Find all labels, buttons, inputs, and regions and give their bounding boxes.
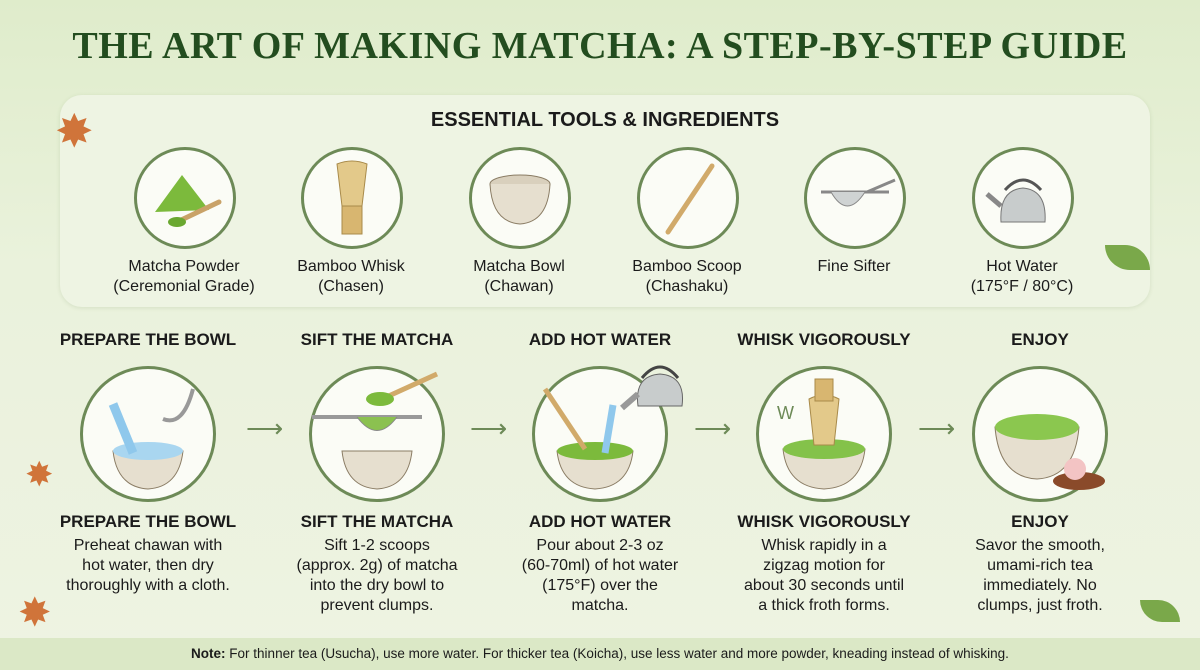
step description: about 30 seconds until xyxy=(744,577,904,594)
step illustration xyxy=(756,366,892,502)
step description: hot water, then dry xyxy=(82,557,214,574)
icon: leaves left: ✸ xyxy=(25,456,54,494)
panel heading: ESSENTIAL TOOLS & INGREDIENTS xyxy=(431,109,779,131)
step description xyxy=(744,537,904,614)
step description: prevent clumps. xyxy=(321,597,433,614)
step 5: enjoy: ENJOY xyxy=(1011,512,1069,531)
icon: leaves bottom-right xyxy=(1140,600,1180,622)
step 3: add hot water xyxy=(522,330,683,614)
step 5: enjoy: ENJOY xyxy=(1011,330,1069,349)
step description: (60-70ml) of hot water xyxy=(522,557,678,574)
icon circle xyxy=(134,147,236,249)
note bar xyxy=(0,638,1200,670)
arrow 3: ⟶ xyxy=(694,413,731,443)
tool: matcha powder xyxy=(113,147,255,295)
step 2: sift the matcha: SIFT THE MATCHA xyxy=(301,512,453,531)
step 4: whisk vigorously xyxy=(737,330,911,614)
step 3: add hot water: ADD HOT WATER xyxy=(529,512,671,531)
step 2: sift the matcha: SIFT THE MATCHA xyxy=(301,330,453,349)
arrow 2: ⟶ xyxy=(470,413,507,443)
tool: bamboo scoop xyxy=(632,147,742,295)
icon: kettle xyxy=(620,366,683,410)
step 2: sift the matcha xyxy=(297,330,458,614)
step description: zigzag motion for xyxy=(763,557,885,574)
tool: fine sifter xyxy=(804,147,906,275)
step description: (approx. 2g) of matcha xyxy=(297,557,457,574)
step description: umami-rich tea xyxy=(987,557,1093,574)
step description xyxy=(522,537,678,614)
step description: Whisk rapidly in a xyxy=(761,537,887,554)
tool: matcha bowl xyxy=(469,147,571,295)
tool: matcha bowl: (Chawan) xyxy=(484,278,554,295)
step description xyxy=(297,537,458,614)
tool: bamboo whisk: Bamboo Whisk xyxy=(297,258,405,275)
step title: PREPARE THE BOWL xyxy=(60,512,236,531)
note bar: Note: For thinner tea (Usucha), use more water. For thicker tea (Koicha), use less water and more powder, kneading instead of whisking. xyxy=(191,646,1009,661)
tool: matcha bowl: Matcha Bowl xyxy=(473,258,565,275)
step description: matcha. xyxy=(572,597,628,614)
step illustration xyxy=(532,366,668,502)
step description: immediately. No xyxy=(983,577,1097,594)
step description: Sift 1-2 scoops xyxy=(324,537,430,554)
step illustration: W xyxy=(777,403,794,423)
label: (Ceremonial Grade) xyxy=(113,278,255,295)
step description: thoroughly with a cloth. xyxy=(66,577,230,594)
step illustration xyxy=(972,366,1108,502)
step 4: whisk vigorously: WHISK VIGOROUSLY xyxy=(737,512,911,531)
step description: Pour about 2-3 oz xyxy=(536,537,664,554)
step 4: whisk vigorously: WHISK VIGOROUSLY xyxy=(737,330,911,349)
arrow 1: ⟶ xyxy=(246,413,283,443)
label xyxy=(113,258,255,295)
tool: bamboo whisk: (Chasen) xyxy=(318,278,384,295)
tool: fine sifter: Fine Sifter xyxy=(818,258,890,275)
step description: (175°F) over the xyxy=(542,577,658,594)
icon: tea leaf right xyxy=(1105,245,1150,270)
arrow 4: ⟶ xyxy=(918,413,955,443)
step heading top: PREPARE THE BOWL xyxy=(60,330,236,349)
step 3: add hot water: ADD HOT WATER xyxy=(529,330,671,349)
step description: Preheat chawan with xyxy=(74,537,222,554)
step illustration xyxy=(80,366,216,502)
step description xyxy=(975,537,1105,614)
tool: hot water xyxy=(971,147,1074,295)
step description: Savor the smooth, xyxy=(975,537,1105,554)
tool: hot water: (175°F / 80°C) xyxy=(971,278,1073,295)
tool: bamboo whisk xyxy=(297,147,405,295)
tool: bamboo scoop: Bamboo Scoop xyxy=(632,258,742,275)
step description: into the dry bowl to xyxy=(310,577,444,594)
tool: hot water: Hot Water xyxy=(986,258,1058,275)
step description: clumps, just froth. xyxy=(977,597,1103,614)
step description: a thick froth forms. xyxy=(758,597,890,614)
label: Matcha Powder xyxy=(128,258,240,275)
title: THE ART OF MAKING MATCHA: A STEP-BY-STEP GUIDE xyxy=(72,25,1128,67)
tool: bamboo scoop: (Chashaku) xyxy=(646,278,728,295)
step illustration xyxy=(309,366,445,502)
panel: essential tools xyxy=(60,95,1150,307)
step 1: prepare the bowl xyxy=(60,330,236,594)
icon: leaves bottom-left: ✸ xyxy=(18,591,52,635)
step description xyxy=(66,537,230,594)
step 5: enjoy xyxy=(972,330,1108,614)
icon: maple leaf top-left: ✸ xyxy=(55,105,94,157)
